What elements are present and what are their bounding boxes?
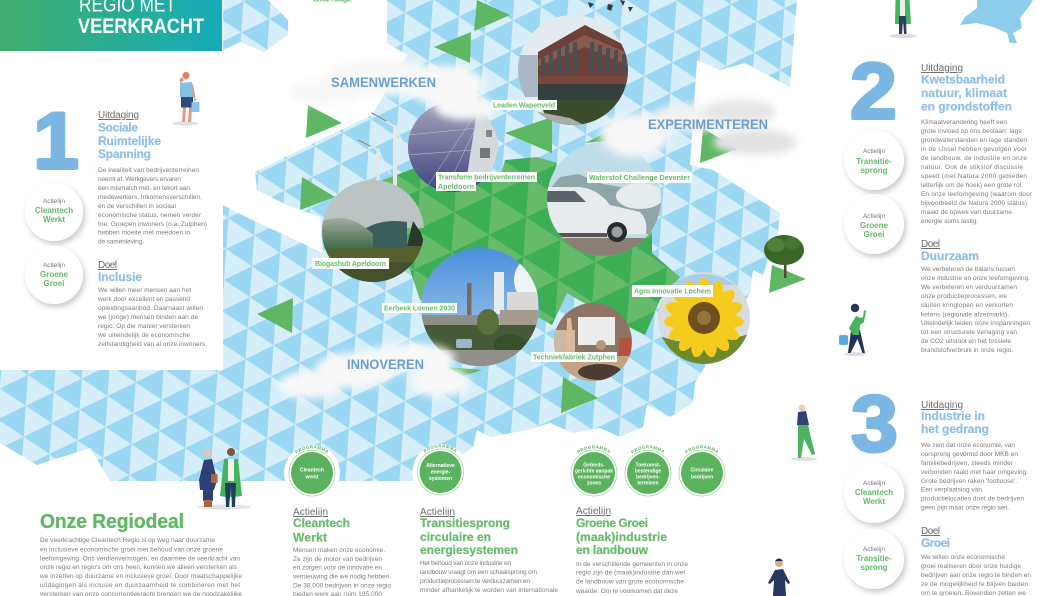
label: techniekfabriek zutphen: Techniekfabriek Zutphen xyxy=(533,354,615,362)
text: challenge 1 body: neemt af. Werkgevers ervaren xyxy=(98,176,181,183)
text: goal 1 body: zelfstandigheid van al onze inwoners. xyxy=(98,341,207,348)
text: challenge 2 body: grote invloed op ons bestaan: lage xyxy=(921,128,1022,135)
programme badge: alternatieve energiesystemen: energie- xyxy=(431,470,451,476)
label: transform bedrijventerreinen apeldoorn: Transform bedrijventerreinen xyxy=(438,174,535,182)
clouds: samenwerken xyxy=(290,60,495,120)
text: challenge 2 body: En onze leefomgeving (waarom door xyxy=(921,191,1033,198)
heading: circulaire en xyxy=(420,530,491,544)
person: walking man bottom xyxy=(768,558,790,596)
panel: challenge 3 xyxy=(844,379,1031,596)
programme badge: gebiedsgerichte aanpak: gerichte aanpak xyxy=(575,468,613,474)
person: walking with blue bag xyxy=(839,304,866,356)
text: goal 3 body xyxy=(921,554,1031,596)
text: challenge 2 body: speelt (met Natura 2000 gebieden xyxy=(921,173,1027,180)
heading xyxy=(420,507,518,557)
heading: doel duurzaam: Duurzaam xyxy=(921,249,979,263)
badge: transitiesprong: sprong xyxy=(860,563,888,572)
label: biogashub apeldoorn xyxy=(312,258,389,269)
programme badge: circulaire bedrijven xyxy=(678,445,726,496)
clouds: innoveren xyxy=(278,343,470,399)
badge: cleantech werkt xyxy=(25,183,83,241)
heading: onze regiodeal: Onze Regiodeal xyxy=(40,511,184,533)
label: agro innovatie lochem: Agro Innovatie Lochem xyxy=(634,288,711,296)
badge: groene groei: Groene xyxy=(860,221,889,230)
heading: Transitiesprong xyxy=(420,516,510,530)
text: goal 1 body xyxy=(97,287,207,348)
text: goal 2 body: Uiteindelijk leiden onze inspanningen xyxy=(921,320,1030,327)
programme badge: toekomstbestendige bedrijventerreinen: bedrijven- xyxy=(636,474,660,480)
text: goal 1 body: We willen meer mensen aan het xyxy=(98,287,191,294)
number 1: 1 xyxy=(33,96,79,185)
programme badge: gebiedsgerichte aanpak: Gebieds- xyxy=(583,462,605,468)
programme badge: cleantech werkt xyxy=(284,445,340,496)
badge: transitiesprong: Transitie- xyxy=(856,554,892,563)
text: challenge 1 body: medewerkers. Inkomensverschillen, xyxy=(98,194,202,201)
heading: (maak)industrie xyxy=(576,530,667,544)
text: goal 2 body: onze industrie en onze leefomgeving. xyxy=(921,275,1030,282)
heading: doel groei xyxy=(921,526,950,550)
programme badge: cleantech werkt: Cleantech xyxy=(300,468,324,474)
heading xyxy=(576,506,667,557)
heading: doel inclusie xyxy=(98,260,142,284)
panel: actielijn groene groei xyxy=(575,506,688,595)
body text: waarde. Om te voorkomen dat deze xyxy=(575,588,678,595)
programme badge: circulaire bedrijven: Circulaire xyxy=(690,468,714,474)
text: challenge 3 body: verbonden raakt met haar omgeving. xyxy=(921,469,1028,476)
text: regiodeal body: De veerkrachtige Cleantech Regio is op weg naar duurzame xyxy=(40,537,215,544)
text: challenge 1 body: de samenleving. xyxy=(98,238,144,246)
person: top woman in green coat xyxy=(889,0,917,38)
text: challenge 2 body: de landbouw, de industrie en onze xyxy=(921,155,1027,162)
text: challenge 1 body: een mismatch met- en tekort aan xyxy=(98,185,190,192)
text: challenge 1 body: en de verschillen in sociaal xyxy=(98,203,177,210)
heading: industrie in het gedrang: Industrie in xyxy=(921,409,985,423)
text: regiodeal body: en inclusieve economische groei met behoud van onze groene xyxy=(40,546,223,554)
text: goal 1 body: we uiteindelijk de economische xyxy=(97,332,190,339)
label: techniekfabriek zutphen xyxy=(531,352,617,362)
heading: doel groei: Groei xyxy=(921,536,950,550)
body text xyxy=(420,560,558,594)
text: goal 2 body: tot een structurele verlaging van xyxy=(921,329,1017,336)
text: challenge 3 body: oorsprong gevormd door MKB en xyxy=(921,451,1018,458)
body text: Mensen maken onze economie. xyxy=(293,547,385,554)
body text: en zorgen voor de innovatie en xyxy=(293,564,382,572)
label: eerbeek loenen 2030: Eerbeek Loenen 2030 xyxy=(384,306,455,312)
badge: transitiesprong: sprong xyxy=(860,166,888,175)
heading: doel duurzaam: Doel xyxy=(921,239,940,250)
text: challenge 2 body: energie soms lastig. xyxy=(921,218,978,225)
body text: In de verschillende gemeenten in onze xyxy=(576,561,688,568)
text: challenge 2 body: letterlijk om de hoek) een grote rol. xyxy=(921,182,1023,189)
icon: netherlands map xyxy=(960,0,1033,43)
text: challenge 1 body: De kwaliteit van bedrijventerreinen xyxy=(98,167,199,174)
body text xyxy=(293,547,391,596)
heading: sociale ruimtelijke spanning: Ruimtelijke xyxy=(98,134,161,148)
heading: sociale ruimtelijke spanning: Uitdaging xyxy=(98,110,139,121)
badge: transitiesprong: Actielijn xyxy=(863,546,885,553)
text: regiodeal body: uitdagingen als inclusie en duurzaamheid te combineren met het xyxy=(40,582,240,589)
heading: sociale ruimtelijke spanning: Sociale xyxy=(98,120,138,134)
heading: Actielijn xyxy=(293,507,328,518)
text: regiodeal body: leefomgeving. Ons verdienvermogen, en daarmee de veerkracht van xyxy=(40,555,240,562)
green triangle cluster xyxy=(383,157,680,335)
text: goal 2 body xyxy=(921,266,1030,354)
badge: cleantech werkt: Cleantech xyxy=(855,488,893,497)
label: innoveren: INNOVEREN xyxy=(347,356,424,372)
title banner xyxy=(0,0,222,51)
programme badge: toekomstbestendige bedrijventerreinen: Toekomst- xyxy=(636,462,661,468)
title banner: VEERKRACHT xyxy=(78,15,204,38)
photo labels xyxy=(312,100,713,362)
number 2: 2 xyxy=(850,46,897,136)
text: challenge 2 body: maakt de opwek van duurzame xyxy=(921,209,1012,216)
programme badge: cleantech werkt: PROGRAMMA xyxy=(294,445,328,454)
photo circle: classroom xyxy=(553,302,633,382)
heading: industrie in het gedrang xyxy=(921,400,989,436)
text: challenge 3 body: Een verplaatsing van xyxy=(921,486,982,494)
body text: productieprocessen te verduurzamen en xyxy=(420,578,530,585)
programme badge: alternatieve energiesystemen xyxy=(412,444,464,496)
badge: transitiesprong xyxy=(844,130,904,190)
label: agro innovatie lochem xyxy=(632,285,713,297)
green accent triangles xyxy=(257,0,806,413)
heading xyxy=(293,507,350,544)
heading: Actielijn xyxy=(576,506,611,517)
text: challenge 3 body: We zien dat onze economie, van xyxy=(921,442,1015,449)
heading: doel duurzaam xyxy=(921,239,979,263)
panel: actielijn cleantech werkt xyxy=(293,507,391,596)
label: experimenteren: EXPERIMENTEREN xyxy=(648,116,768,132)
programme badge: gebiedsgerichte aanpak: economische xyxy=(578,474,610,480)
programme badge: alternatieve energiesystemen: PROGRAMMA xyxy=(423,444,456,453)
text: goal 3 body: ze de mogelijkheid te blijven bieden xyxy=(921,581,1028,588)
body text: minder afhankelijk te worden van internationale xyxy=(420,587,558,594)
heading: en landbouw xyxy=(576,543,649,557)
heading: doel groei: Doel xyxy=(921,526,940,537)
badge: transitiesprong: Transitie- xyxy=(856,157,892,166)
heading: kwetsbaarheid: Uitdaging xyxy=(921,63,963,74)
text: challenge 3 body: productielocaties doet de bedrijven xyxy=(921,496,1024,502)
text: challenge 3 body: familiebedrijven, steeds minder xyxy=(921,460,1014,467)
badge: cleantech werkt: Cleantech xyxy=(35,206,73,215)
label: samenwerken: SAMENWERKEN xyxy=(331,74,436,90)
programme badge: toekomstbestendige bedrijventerreinen: bestendige xyxy=(635,468,661,474)
text: challenge 2 body xyxy=(921,119,1033,225)
badge: cleantech werkt: Actielijn xyxy=(863,480,885,487)
heading: industrie in het gedrang: het gedrang xyxy=(921,422,989,436)
heading: kwetsbaarheid: natuur, klimaat xyxy=(921,86,1007,100)
person: walking woman xyxy=(791,404,817,461)
text: challenge 1 body: economische status, nemen verder xyxy=(98,212,202,219)
text: challenge 2 body: grondwaterstanden en lage standen xyxy=(921,137,1027,144)
badge: groene groei xyxy=(844,194,904,254)
text: goal 3 body: We willen onze economische xyxy=(921,554,1005,561)
label: eerbeek loenen 2030 xyxy=(382,303,457,313)
programme badge: circulaire bedrijven: PROGRAMMA xyxy=(684,445,718,454)
text: challenge 2 body: natuur. Ook de stikstof discussie xyxy=(921,164,1023,171)
label: leaden wapenveld: Leaden Wapenveld xyxy=(493,102,555,110)
text: goal 1 body: we (jonge) mensen binden aan de xyxy=(97,314,198,321)
body text: Het behoud van onze industrie en xyxy=(420,560,511,567)
person: man with bag xyxy=(172,72,200,126)
heading: industrie in het gedrang: Uitdaging xyxy=(921,400,963,411)
text: goal 2 body: de CO2 uitstoot en het fossiele xyxy=(921,338,1011,345)
heading: energiesystemen xyxy=(420,543,518,557)
text: goal 2 body: ketens (regionale afzetmarkt). xyxy=(921,312,1009,318)
text: goal 3 body: bedrijven aan onze regio te binden en xyxy=(921,572,1031,579)
badge: groene groei: Groene xyxy=(40,270,69,279)
badge: cleantech werkt: Werkt xyxy=(43,215,65,224)
photo circle: solar panels xyxy=(408,104,498,192)
label: waterstof challenge deventer: Waterstof Challenge Deventer xyxy=(589,175,690,182)
label: waterstof challenge deventer xyxy=(587,172,692,183)
clouds: experimenteren xyxy=(600,99,797,157)
panel: actielijn transitiesprong xyxy=(420,507,558,594)
label: transform bedrijventerreinen apeldoorn: Apeldoorn xyxy=(438,184,474,191)
programme badge: circulaire bedrijven: bedrijven xyxy=(691,474,713,480)
birds xyxy=(588,0,633,12)
badge: groene groei xyxy=(25,246,83,304)
text: challenge 2 body: bijvoorbeeld de Natura 2000 status) xyxy=(921,200,1027,207)
photo circle: hydrogen car xyxy=(545,140,664,260)
text: regiodeal body: we inzetten op duurzame en inclusieve groei. Door maatschappelijke xyxy=(39,573,242,580)
body text: Ze zijn de motor van bedrijven xyxy=(293,556,382,563)
text: regiodeal body xyxy=(39,537,242,596)
body text: vernieuwing die we nodig hebben. xyxy=(293,574,391,580)
body text: landbouw vraagt om een schaalsprong om xyxy=(420,569,537,576)
programme badge: gebiedsgerichte aanpak: PROGRAMMA xyxy=(576,445,610,454)
panel: challenge 1 xyxy=(25,96,207,348)
heading: kwetsbaarheid: Kwetsbaarheid xyxy=(921,72,1005,86)
photo circle: sunflower xyxy=(656,270,752,366)
heading: sociale ruimtelijke spanning: Spanning xyxy=(98,147,151,161)
text: goal 2 body: brandstofverbruik in onze regio. xyxy=(921,347,1013,354)
text: goal 1 body: opleidingsaanbod. Daarnaast willen xyxy=(98,305,203,312)
programme badge: cleantech werkt: werkt xyxy=(304,474,319,480)
photo circle: biogas xyxy=(320,178,426,287)
text: challenge 3 body: Grote bedrijven raken 'footloose'. xyxy=(921,478,1017,485)
background pattern: blue triangles xyxy=(0,0,797,481)
person: couple xyxy=(197,448,251,510)
label: transform bedrijventerreinen apeldoorn xyxy=(436,172,537,191)
text: challenge 3 body xyxy=(921,442,1028,512)
programme badge: gebiedsgerichte aanpak xyxy=(570,445,618,496)
heading: doel inclusie: Doel xyxy=(98,260,117,271)
label: biogashub apeldoorn: Biogashub Apeldoorn xyxy=(315,261,386,268)
text: goal 1 body: werk door excellent en passend xyxy=(97,296,190,303)
programme badge: gebiedsgerichte aanpak: zones xyxy=(587,480,601,486)
text: challenge 2 body: in de IJssel hebben gevolgen voor xyxy=(921,146,1028,153)
wind turbines xyxy=(358,113,407,185)
text: goal 2 body: sluiten kringlopen en verkorten xyxy=(921,302,1013,309)
text: challenge 1 body xyxy=(98,167,207,246)
programme badge: alternatieve energiesystemen: systemen xyxy=(429,476,452,482)
body text: de landbouw van grote economische xyxy=(576,578,684,586)
heading: Werkt xyxy=(293,530,327,544)
tree xyxy=(764,235,804,278)
text: challenge 3 body: geen pijn maar onze regio wel. xyxy=(921,504,1009,512)
programme badge: alternatieve energiesystemen: Alternatieve xyxy=(426,463,455,469)
text: goal 3 body: groei realiseren door onze huidige xyxy=(921,563,1021,570)
body text: regio zijn de (maak)industrie dan wel xyxy=(576,570,686,576)
panel: challenge 2 xyxy=(844,46,1033,354)
heading: sociale ruimtelijke spanning xyxy=(98,110,161,161)
text: challenge 1 body: hebben moeite met meedoen in xyxy=(98,230,190,236)
text: regiodeal body: onze regio en regio's om ons heen, kunnen we alleen versterken als xyxy=(40,564,238,571)
badge: transitiesprong: Actielijn xyxy=(863,148,885,155)
body text: De 38.000 bedrijven in onze regio xyxy=(293,582,391,590)
photo circle: industrial chimneys xyxy=(420,247,542,370)
heading: doel inclusie: Inclusie xyxy=(98,270,142,284)
text: challenge 2 body: Klimaatverandering heeft een xyxy=(921,119,1007,126)
badge: groene groei: Groei xyxy=(864,230,884,239)
heading: kwetsbaarheid: en grondstoffen xyxy=(921,100,1012,114)
heading: Actielijn xyxy=(420,507,455,518)
badge: cleantech werkt: Werkt xyxy=(863,497,885,506)
badge: groene groei: Actielijn xyxy=(43,262,65,269)
text: goal 2 body: onze productieprocessen, we xyxy=(921,293,1007,300)
text: goal 2 body: We verbeteren en verduurzamen xyxy=(921,284,1017,291)
heading: kwetsbaarheid xyxy=(921,63,1012,114)
number 3: 3 xyxy=(851,379,898,468)
programme badge: toekomstbestendige bedrijventerreinen: terreinen xyxy=(637,480,659,486)
body text xyxy=(575,561,688,595)
photo circle: building xyxy=(518,15,628,125)
text: challenge 1 body: toe. Groepen inwoners (o.a. Zutphen) xyxy=(98,221,207,228)
badge: transitiesprong xyxy=(844,529,904,589)
badge: groene groei: Actielijn xyxy=(863,213,885,220)
badge: cleantech werkt: Actielijn xyxy=(43,198,65,205)
text: goal 2 body: We verbeteren de balans tussen xyxy=(921,266,1015,273)
heading: Cleantech xyxy=(293,516,350,530)
text: goal 1 body: regio. Op die manier versterken xyxy=(98,323,190,330)
programme badge: toekomstbestendige bedrijventerreinen xyxy=(624,445,672,496)
badge: cleantech werkt xyxy=(844,463,904,523)
heading: Groene Groei xyxy=(576,516,648,530)
programme badge: toekomstbestendige bedrijventerreinen: PROGRAMMA xyxy=(630,445,664,454)
label: leaden wapenveld xyxy=(491,100,557,110)
badge: groene groei: Groei xyxy=(44,279,64,288)
